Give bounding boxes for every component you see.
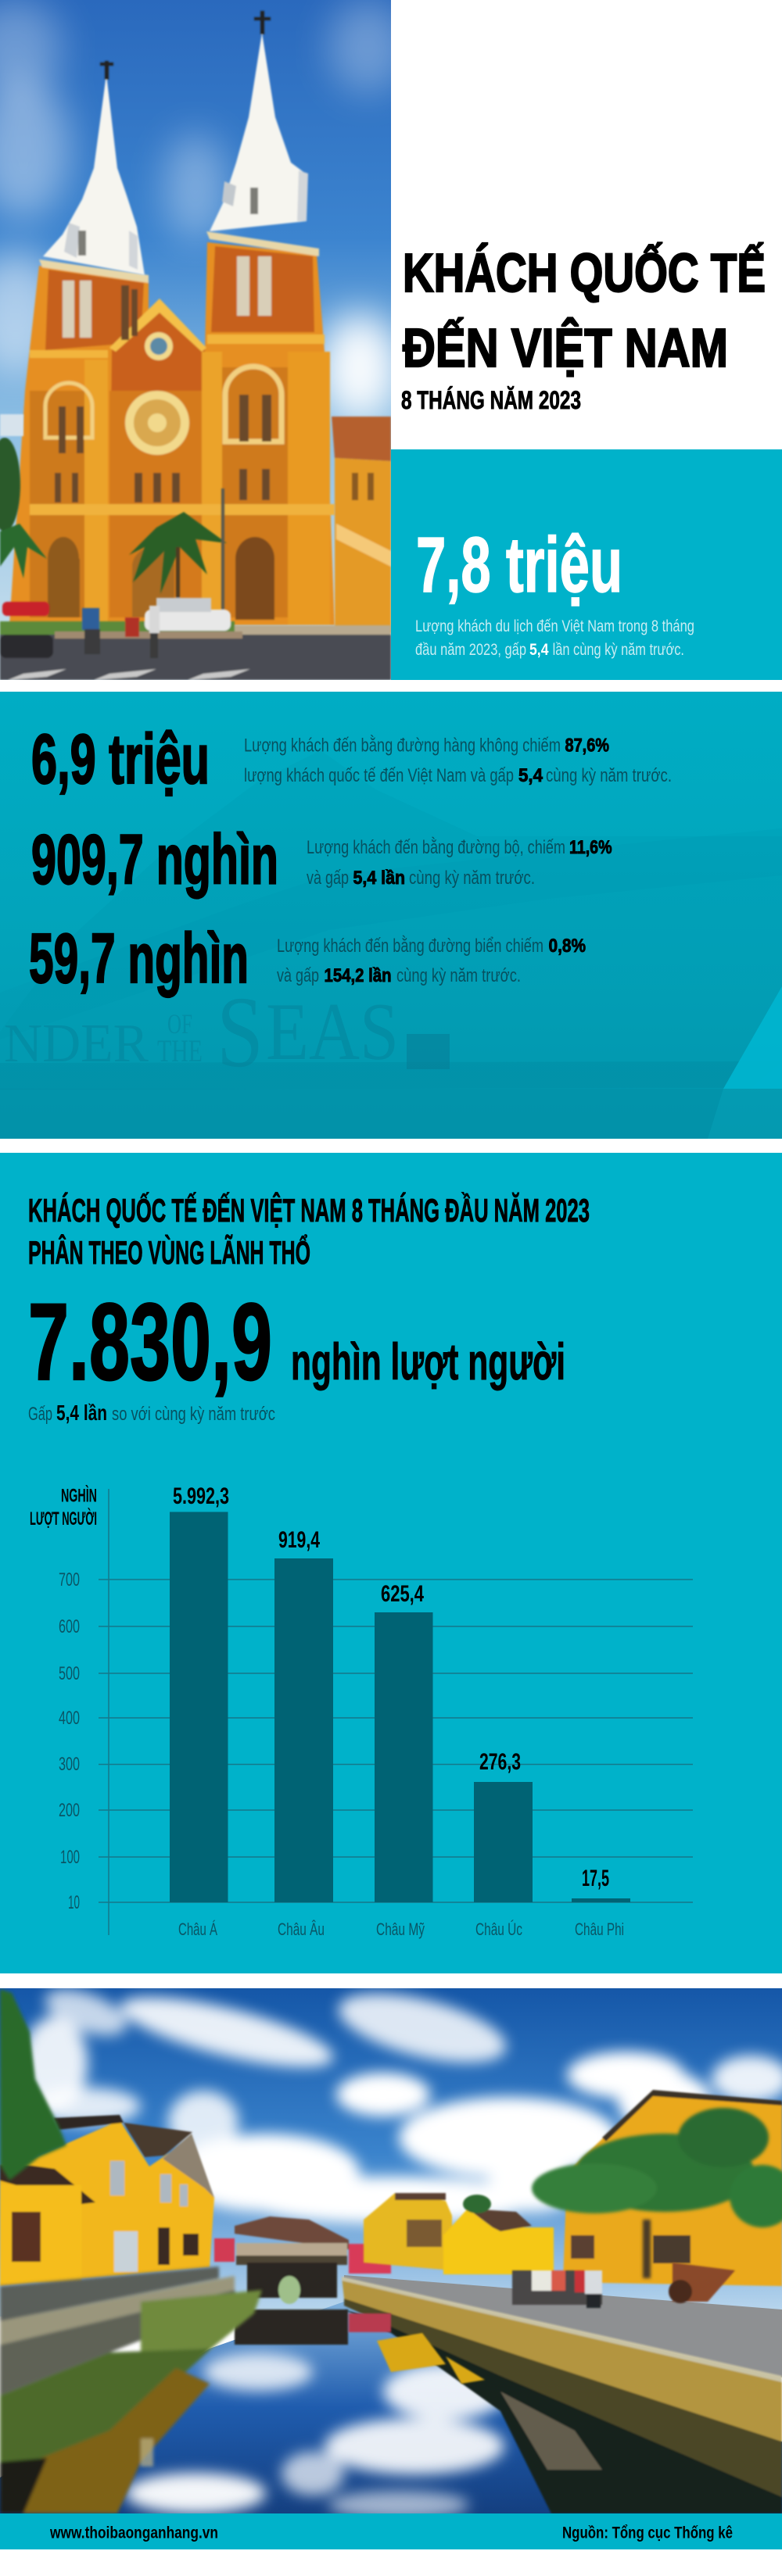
stat: road: và gấp <box>307 868 349 889</box>
axis unit label <box>30 1485 97 1530</box>
y axis labels: 100 <box>60 1847 80 1868</box>
side annex <box>332 417 391 633</box>
panel: total visitors <box>391 449 782 680</box>
bar: Châu Mỹ: Châu Mỹ <box>376 1919 425 1939</box>
church facade <box>9 231 335 625</box>
y axis labels: 300 <box>59 1754 80 1775</box>
bar: Châu Mỹ <box>375 1581 433 1939</box>
website: www.thoibaonganhang.vn <box>49 2524 218 2542</box>
water reflections <box>125 2353 508 2519</box>
bar: Châu Úc: 276,3 <box>479 1749 521 1775</box>
bar: Châu Phi: Châu Phi <box>575 1919 624 1939</box>
growth note: so với cùng kỳ năm trước <box>112 1404 275 1425</box>
ship name: THE <box>157 1033 203 1068</box>
axis unit label: LƯỢT NGƯỜI <box>30 1508 97 1530</box>
description: Lượng khách du lịch đến Việt Nam trong 8 tháng <box>415 617 694 635</box>
sky clouds <box>0 0 407 422</box>
right tree <box>532 2108 782 2278</box>
bar: Châu Á: Châu Á <box>178 1919 217 1939</box>
middle houses <box>364 2193 554 2274</box>
bar chart <box>30 1483 693 1939</box>
stat: road: 11,6% <box>569 837 612 858</box>
growth note <box>28 1401 275 1425</box>
description <box>415 617 694 659</box>
stat: road <box>31 821 612 900</box>
bar: Châu Âu: Châu Âu <box>278 1919 325 1939</box>
total number: 7.830,9 <box>28 1280 272 1403</box>
heading: PHÂN THEO VÙNG LÃNH THỔ <box>28 1233 310 1271</box>
ship background <box>0 986 782 1132</box>
bar: Châu Phi <box>572 1866 630 1939</box>
y axis labels <box>59 1569 80 1913</box>
title <box>403 242 766 378</box>
trees and ground <box>0 414 391 680</box>
description: lần cùng kỳ năm trước. <box>553 641 684 659</box>
stat: air: lượng khách quốc tế đến Việt Nam và gấp <box>244 765 514 786</box>
panel: arrivals by transport <box>0 692 782 1139</box>
ship name: S <box>217 976 264 1089</box>
stat: road: cùng kỳ năm trước. <box>409 868 535 889</box>
panel: arrivals by region <box>0 1153 782 1973</box>
y axis labels: 500 <box>59 1663 80 1684</box>
bar: Châu Phi: 17,5 <box>582 1866 609 1891</box>
stat: sea: 0,8% <box>549 936 586 957</box>
stat: sea: 154,2 lần <box>324 965 391 986</box>
bridge reflection <box>235 2309 485 2384</box>
panel: cathedral photo <box>0 0 407 680</box>
heading <box>28 1191 590 1271</box>
source: Nguồn: Tổng cục Thống kê <box>562 2524 733 2542</box>
right stone wall <box>342 2277 782 2513</box>
growth note: Gấp <box>28 1404 52 1425</box>
bar: Châu Úc: Châu Úc <box>475 1919 522 1939</box>
ship name <box>5 999 394 1067</box>
left stone walls and grass <box>0 2267 262 2513</box>
bar: Châu Á: 5.992,3 <box>173 1483 229 1509</box>
stat: air: 6,9 triệu <box>31 721 210 799</box>
left tree <box>0 1989 66 2181</box>
left houses <box>0 2115 214 2286</box>
stat: road: Lượng khách đến bằng đường bộ, chiếm <box>307 837 565 858</box>
y axis labels: 600 <box>59 1616 80 1637</box>
stat: sea: và gấp <box>277 965 319 986</box>
stat: air: 87,6% <box>565 735 609 757</box>
footer bar <box>0 2513 782 2549</box>
stat: air: cùng kỳ năm trước. <box>546 765 672 786</box>
stat: road: 909,7 nghìn <box>31 821 278 900</box>
y axis labels: 700 <box>59 1569 80 1590</box>
y axis labels: 200 <box>59 1800 80 1821</box>
stat: sea <box>29 920 586 998</box>
y axis labels: 400 <box>59 1708 80 1729</box>
growth note: 5,4 lần <box>56 1401 107 1425</box>
big number: 7,8 triệu <box>416 521 622 609</box>
total number <box>28 1280 565 1403</box>
bar: Châu Âu: 919,4 <box>278 1527 320 1553</box>
ship name: EAS <box>266 986 399 1077</box>
right big house <box>563 2090 782 2286</box>
clouds <box>22 1980 782 2224</box>
description: đầu năm 2023, gấp <box>415 641 526 659</box>
panel: Hoi An photo <box>0 1980 782 2519</box>
subtitle: 8 THÁNG NĂM 2023 <box>401 386 581 414</box>
canal water <box>0 2302 782 2513</box>
cart and tourists <box>512 2263 735 2308</box>
axis unit label: NGHÌN <box>61 1485 97 1507</box>
left spire <box>43 61 145 275</box>
stat: sea: 59,7 nghìn <box>29 920 249 998</box>
stat: air: 5,4 <box>518 765 543 786</box>
ship name: OF <box>167 1008 192 1039</box>
bar: Châu Mỹ: 625,4 <box>381 1581 424 1607</box>
right spire <box>210 11 308 231</box>
bar: Châu Âu <box>274 1527 333 1939</box>
ship name: NDER <box>4 1014 149 1074</box>
stat: sea: cùng kỳ năm trước. <box>396 965 521 986</box>
stat: road: 5,4 lần <box>353 868 405 889</box>
bar: Châu Á <box>170 1483 229 1939</box>
stat: air <box>31 721 672 799</box>
street <box>344 2275 782 2377</box>
bridge <box>214 2216 391 2304</box>
stat: sea: Lượng khách đến bằng đường biển chiếm <box>277 936 543 957</box>
total number: nghìn lượt người <box>291 1333 565 1390</box>
bar: Châu Úc <box>474 1749 533 1939</box>
y axis labels: 10 <box>68 1892 80 1913</box>
description: 5,4 <box>529 641 549 659</box>
stat: air: Lượng khách đến bằng đường hàng không chiếm <box>244 735 561 757</box>
